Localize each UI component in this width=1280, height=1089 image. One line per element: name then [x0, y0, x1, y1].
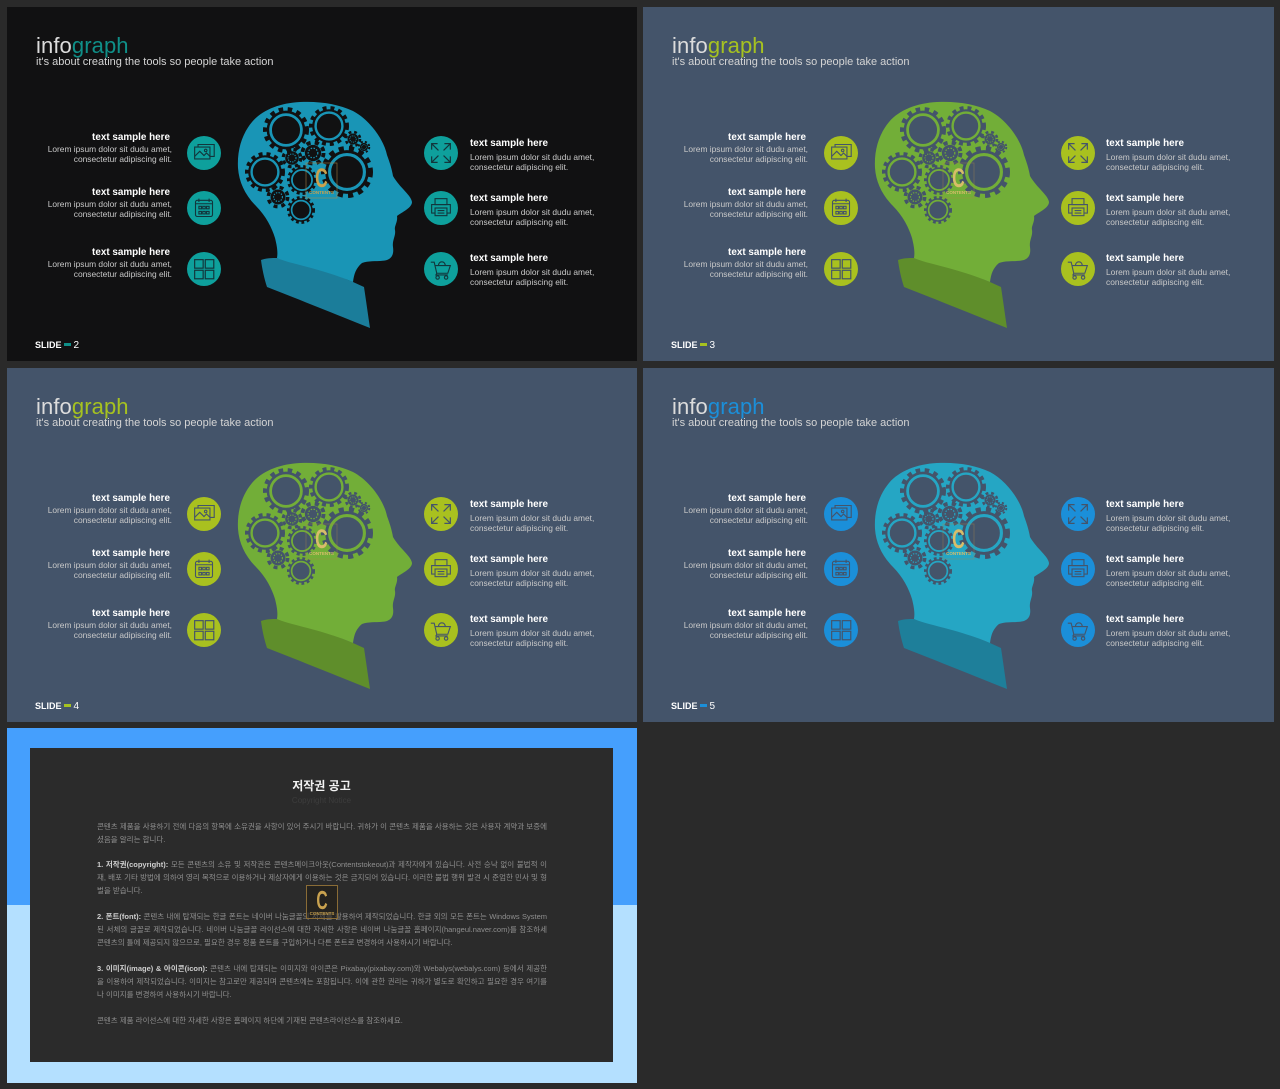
text block left 1: text sample here: [92, 132, 170, 143]
notice title: 저작권 공고: [292, 779, 351, 793]
text block right 1: Lorem ipsum dolor sit dudu amet,: [1106, 513, 1230, 523]
text block left 2: [48, 187, 172, 219]
text block left 2: Lorem ipsum dolor sit dudu amet,: [48, 199, 172, 209]
text block left 2: consectetur adipiscing elit.: [74, 209, 172, 219]
slide number: SLIDE 3: [671, 340, 715, 351]
head with gears and icon circles: C: [315, 523, 328, 554]
text block right 1: text sample here: [1106, 499, 1184, 510]
subtitle: it's about creating the tools so people take action: [672, 56, 910, 68]
text block right 2: [1106, 554, 1230, 588]
panel: slide 4 slate green: [7, 368, 637, 722]
text block left 3: consectetur adipiscing elit.: [74, 269, 172, 279]
panel: slide 2 black teal: [7, 7, 637, 361]
title: infograph: [672, 394, 765, 419]
text block right 2: text sample here: [1106, 554, 1184, 565]
text block left 2: consectetur adipiscing elit.: [710, 570, 808, 580]
text block right 2: consectetur adipiscing elit.: [1106, 217, 1204, 227]
panel: slide 5 slate blue: [643, 368, 1274, 722]
text block right 1: [470, 499, 594, 533]
intro line 2: 셨음을 알리는 합니다.: [97, 835, 165, 844]
head with gears and icon circles: C: [952, 523, 965, 554]
text block right 1: Lorem ipsum dolor sit dudu amet,: [470, 513, 594, 523]
watermark: CONTENTS: [310, 911, 334, 916]
text block right 3: text sample here: [470, 614, 548, 625]
watermark: C: [316, 886, 328, 915]
text block right 1: consectetur adipiscing elit.: [470, 162, 568, 172]
text block right 3: consectetur adipiscing elit.: [1106, 638, 1204, 648]
text block right 2: consectetur adipiscing elit.: [1106, 578, 1204, 588]
text block left 3: [48, 608, 172, 640]
head with gears and icon circles: CONTENTS: [309, 551, 334, 556]
text block right 3: [1106, 614, 1230, 648]
text block right 3: consectetur adipiscing elit.: [470, 638, 568, 648]
subtitle: it's about creating the tools so people take action: [36, 417, 274, 429]
clause 2 line 3: 콘텐츠의 틀에 제공되지 않으므로, 필요한 경우 정품 폰트를 구입하거나 다른 폰트로 변경하여 사용하시기 바랍니다.: [97, 938, 453, 947]
text block right 1: consectetur adipiscing elit.: [1106, 162, 1204, 172]
text block right 1: Lorem ipsum dolor sit dudu amet,: [470, 152, 594, 162]
text block right 1: Lorem ipsum dolor sit dudu amet,: [1106, 152, 1230, 162]
text block left 3: Lorem ipsum dolor sit dudu amet,: [48, 259, 172, 269]
text block left 3: [684, 608, 808, 640]
text block right 2: Lorem ipsum dolor sit dudu amet,: [470, 207, 594, 217]
text block right 2: text sample here: [470, 554, 548, 565]
text block left 3: text sample here: [728, 247, 806, 258]
closing line: 콘텐츠 제품 라이선스에 대한 자세한 사항은 홈페이지 하단에 기재된 콘텐츠라이선스를 참조하세요.: [97, 1016, 403, 1025]
text block right 2: text sample here: [1106, 193, 1184, 204]
head with gears and icon circles: CONTENTS: [946, 551, 971, 556]
text block left 2: Lorem ipsum dolor sit dudu amet,: [48, 560, 172, 570]
text block right 2: Lorem ipsum dolor sit dudu amet,: [1106, 568, 1230, 578]
text block right 1: [1106, 499, 1230, 533]
text block right 3: Lorem ipsum dolor sit dudu amet,: [1106, 628, 1230, 638]
slide number: SLIDE 5: [671, 701, 715, 712]
text block right 1: text sample here: [470, 138, 548, 149]
head with gears and icon circles: CONTENTS: [946, 190, 971, 195]
text block left 2: [48, 548, 172, 580]
text block right 3: Lorem ipsum dolor sit dudu amet,: [470, 628, 594, 638]
text block left 1: Lorem ipsum dolor sit dudu amet,: [48, 144, 172, 154]
text block left 1: consectetur adipiscing elit.: [74, 154, 172, 164]
text block left 2: text sample here: [92, 187, 170, 198]
text block left 2: Lorem ipsum dolor sit dudu amet,: [684, 560, 808, 570]
text block right 1: consectetur adipiscing elit.: [1106, 523, 1204, 533]
subtitle: it's about creating the tools so people take action: [36, 56, 274, 68]
text block left 1: text sample here: [92, 493, 170, 504]
text block right 2: Lorem ipsum dolor sit dudu amet,: [470, 568, 594, 578]
text block left 3: consectetur adipiscing elit.: [710, 630, 808, 640]
text block right 2: consectetur adipiscing elit.: [470, 217, 568, 227]
text block left 2: Lorem ipsum dolor sit dudu amet,: [684, 199, 808, 209]
text block right 2: [470, 554, 594, 588]
text block left 1: Lorem ipsum dolor sit dudu amet,: [684, 505, 808, 515]
text block right 3: consectetur adipiscing elit.: [470, 277, 568, 287]
text block left 2: consectetur adipiscing elit.: [74, 570, 172, 580]
text block left 1: consectetur adipiscing elit.: [710, 515, 808, 525]
text block left 1: text sample here: [728, 493, 806, 504]
text block right 2: Lorem ipsum dolor sit dudu amet,: [1106, 207, 1230, 217]
text block right 1: text sample here: [470, 499, 548, 510]
text block right 1: [1106, 138, 1230, 172]
text block right 2: consectetur adipiscing elit.: [470, 578, 568, 588]
head with gears and icon circles: [187, 462, 458, 689]
title: infograph: [36, 394, 129, 419]
slide number: SLIDE 2: [35, 340, 79, 351]
text block left 2: text sample here: [728, 548, 806, 559]
text block left 3: Lorem ipsum dolor sit dudu amet,: [48, 620, 172, 630]
text block left 2: [684, 187, 808, 219]
notice card: [30, 748, 613, 1062]
text block left 3: text sample here: [92, 608, 170, 619]
head with gears and icon circles: C: [315, 162, 328, 193]
text block right 3: text sample here: [1106, 614, 1184, 625]
head with gears and icon circles: [824, 102, 1095, 328]
title: infograph: [672, 33, 765, 58]
text block left 3: Lorem ipsum dolor sit dudu amet,: [684, 620, 808, 630]
text block left 1: [684, 493, 808, 525]
text block left 1: Lorem ipsum dolor sit dudu amet,: [48, 505, 172, 515]
text block left 3: [684, 247, 808, 279]
head with gears and icon circles: [824, 462, 1095, 689]
text block right 3: [470, 614, 594, 648]
clause 3 line 3: 나 이미지를 변경하여 사용하시기 바랍니다.: [97, 990, 232, 999]
text block left 2: text sample here: [728, 187, 806, 198]
head with gears and icon circles: [187, 102, 458, 328]
text block left 1: [48, 493, 172, 525]
panel: copyright notice: [7, 728, 637, 1083]
slide number: SLIDE 4: [35, 701, 79, 712]
text block left 3: text sample here: [92, 247, 170, 258]
text block right 2: [470, 193, 594, 227]
text block left 3: text sample here: [728, 608, 806, 619]
text block left 2: consectetur adipiscing elit.: [710, 209, 808, 219]
text block right 2: [1106, 193, 1230, 227]
text block right 3: [470, 253, 594, 287]
subtitle: it's about creating the tools so people take action: [672, 417, 910, 429]
text block left 3: [48, 247, 172, 279]
text block left 1: [684, 132, 808, 164]
text block right 2: text sample here: [470, 193, 548, 204]
text block left 2: [684, 548, 808, 580]
text block right 3: [1106, 253, 1230, 287]
text block left 1: [48, 132, 172, 164]
text block left 3: Lorem ipsum dolor sit dudu amet,: [684, 259, 808, 269]
text block left 1: text sample here: [728, 132, 806, 143]
text block left 2: text sample here: [92, 548, 170, 559]
watermark: [306, 885, 338, 919]
notice subtitle: Copyright Notice: [292, 796, 351, 805]
text block right 3: text sample here: [1106, 253, 1184, 264]
head with gears and icon circles: C: [952, 162, 965, 193]
clause 1 line 3: 벌을 받습니다.: [97, 886, 143, 895]
text block right 3: Lorem ipsum dolor sit dudu amet,: [470, 267, 594, 277]
text block left 3: consectetur adipiscing elit.: [710, 269, 808, 279]
text block left 1: Lorem ipsum dolor sit dudu amet,: [684, 144, 808, 154]
text block left 3: consectetur adipiscing elit.: [74, 630, 172, 640]
text block right 3: consectetur adipiscing elit.: [1106, 277, 1204, 287]
text block right 1: [470, 138, 594, 172]
head with gears and icon circles: CONTENTS: [309, 190, 334, 195]
panel: slide 3 slate green: [643, 7, 1274, 361]
text block right 1: text sample here: [1106, 138, 1184, 149]
title: infograph: [36, 33, 129, 58]
text block right 1: consectetur adipiscing elit.: [470, 523, 568, 533]
text block right 3: text sample here: [470, 253, 548, 264]
text block left 1: consectetur adipiscing elit.: [710, 154, 808, 164]
text block left 1: consectetur adipiscing elit.: [74, 515, 172, 525]
text block right 3: Lorem ipsum dolor sit dudu amet,: [1106, 267, 1230, 277]
